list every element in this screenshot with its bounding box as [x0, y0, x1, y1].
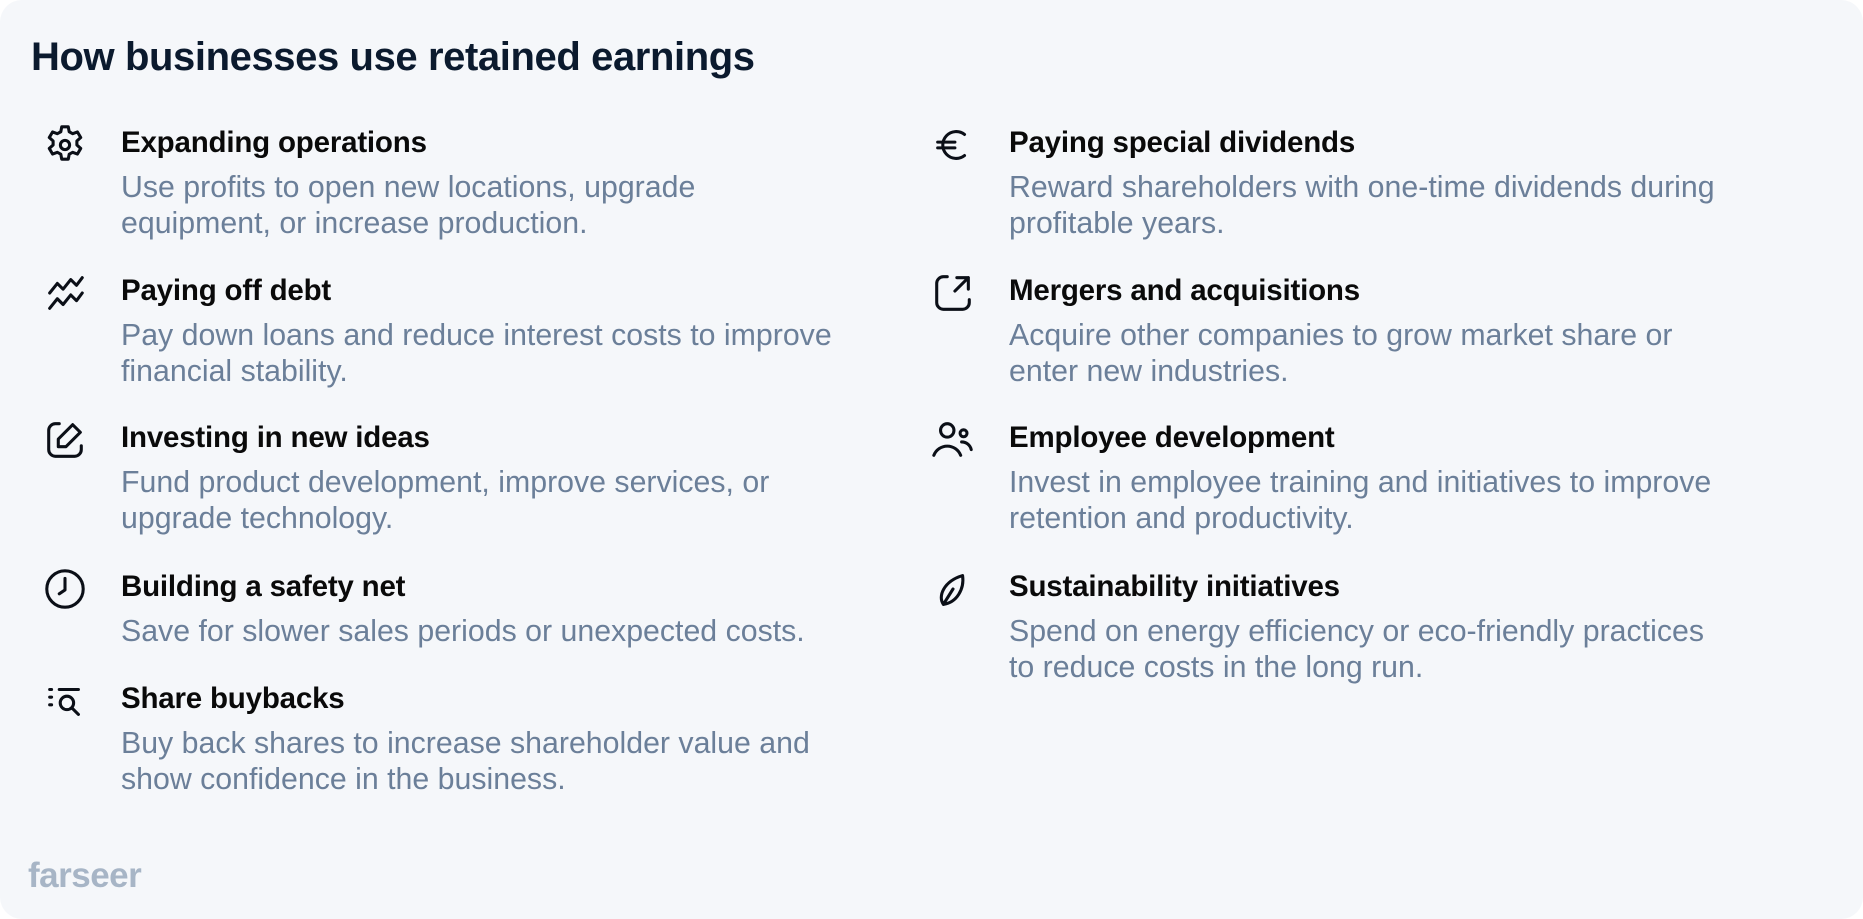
item: paying special dividends — [936, 126, 1715, 240]
icon: external link square — [935, 275, 971, 311]
item: mergers and acquisitions: Mergers and acquisitions — [1009, 274, 1360, 307]
item: sustainability initiatives: Sustainability initiatives — [1009, 570, 1340, 603]
item: expanding operations: Use profits to open new locations, upgrade — [121, 171, 695, 204]
icon: clock — [45, 569, 85, 609]
item: paying off debt: Paying off debt — [121, 274, 331, 307]
item: share buybacks: show confidence in the business. — [121, 763, 566, 796]
icon: gear — [48, 125, 82, 161]
item: share buybacks: Share buybacks — [121, 682, 344, 715]
item: sustainability initiatives — [940, 570, 1704, 684]
item: share buybacks — [48, 682, 810, 796]
item: share buybacks: Buy back shares to increase shareholder value and — [121, 727, 810, 760]
item: mergers and acquisitions: enter new industries. — [1009, 355, 1289, 388]
item: investing in new ideas: upgrade technology. — [121, 502, 393, 535]
item: building a safety net: Save for slower sales periods or unexpected costs. — [121, 615, 805, 648]
icon: zigzag trend — [48, 276, 84, 310]
icon: people — [932, 422, 973, 457]
icon: euro — [936, 130, 966, 160]
item: employee development: Employee development — [1009, 421, 1335, 454]
item: expanding operations — [48, 125, 695, 240]
item: employee development — [932, 421, 1711, 535]
item: expanding operations: Expanding operations — [121, 126, 427, 159]
item: employee development: retention and productivity. — [1009, 502, 1354, 535]
item: mergers and acquisitions — [935, 274, 1672, 388]
item: expanding operations: equipment, or increase production. — [121, 207, 588, 240]
icon: list search — [48, 688, 80, 716]
icon: leaf — [940, 574, 964, 606]
item: investing in new ideas: Investing in new ideas — [121, 421, 430, 454]
title: How businesses use retained earnings — [31, 35, 755, 79]
item: sustainability initiatives: Spend on energy efficiency or eco-friendly practices — [1009, 615, 1704, 648]
item: mergers and acquisitions: Acquire other companies to grow market share or — [1009, 319, 1672, 352]
item: paying off debt: Pay down loans and reduce interest costs to improve — [121, 319, 832, 352]
item: paying special dividends: Reward shareholders with one-time dividends during — [1009, 171, 1715, 204]
item: building a safety net: Building a safety net — [121, 570, 405, 603]
item: employee development: Invest in employee training and initiatives to improve — [1009, 466, 1711, 499]
item: investing in new ideas: Fund product development, improve services, or — [121, 466, 769, 499]
item: paying off debt — [48, 274, 832, 388]
item: sustainability initiatives: to reduce costs in the long run. — [1009, 651, 1423, 684]
item: investing in new ideas — [47, 421, 769, 535]
icon: edit square — [47, 422, 83, 458]
item: paying off debt: financial stability. — [121, 355, 348, 388]
item: paying special dividends: Paying special dividends — [1009, 126, 1355, 159]
item: building a safety net — [45, 569, 805, 648]
item: paying special dividends: profitable years. — [1009, 207, 1225, 240]
logo: farseer: farseer — [28, 856, 141, 895]
